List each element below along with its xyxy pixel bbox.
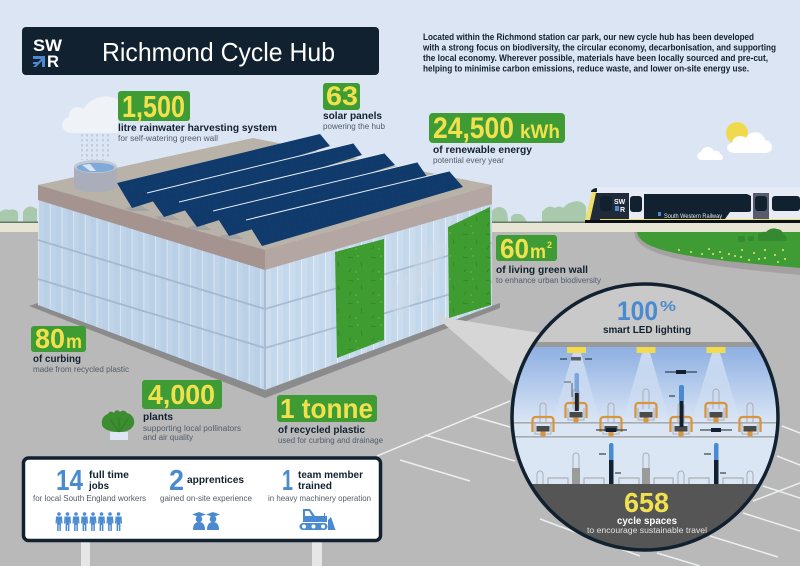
lawn (634, 228, 800, 275)
stat: recycled plastic: of recycled plastic (278, 424, 365, 436)
upper bike racks (532, 389, 760, 436)
stat: plants: 4,000 (148, 379, 215, 410)
stat: curbing: m (66, 332, 82, 353)
stat: plants: supporting local pollinators (143, 424, 241, 433)
car park ground (0, 232, 800, 566)
training stat (268, 465, 371, 530)
apprentices stat: 2 (169, 465, 184, 497)
SWR logo: SW (33, 36, 63, 55)
train: R (620, 207, 625, 214)
stat: renewable energy: potential every year (433, 156, 504, 165)
SWR logo: R (47, 52, 59, 71)
hanging bikes (560, 357, 732, 485)
intro paragraph (422, 32, 776, 74)
zoom beam (435, 316, 540, 385)
icon: plant (102, 410, 134, 440)
stat: solar panels: solar panels (323, 110, 382, 122)
stat: plants: plants (143, 411, 173, 423)
stat: rainwater (118, 89, 277, 143)
rain cloud (62, 96, 118, 160)
stat: curbing: 80 (35, 323, 65, 354)
stat: green wall: m (530, 242, 546, 263)
solar panels (117, 134, 463, 246)
stat: solar panels: powering the hub (323, 122, 386, 131)
left glass wall (38, 200, 265, 390)
sky background (0, 0, 800, 223)
living green wall: right (448, 207, 491, 318)
stat: green wall: 2 (547, 240, 552, 250)
training stat: 1 (282, 465, 293, 497)
building (29, 138, 500, 398)
icon: bulldozer (300, 509, 336, 530)
roof fascia: left (38, 185, 265, 270)
lamps (567, 347, 726, 353)
roof fascia: right (265, 185, 492, 270)
train: SW (614, 199, 626, 206)
right glass wall (264, 203, 492, 390)
SWR logo (33, 36, 63, 71)
jobs stat: jobs (88, 480, 109, 492)
jobs stat: 14 (56, 465, 83, 497)
stat: curbing: made from recycled plastic (33, 365, 129, 374)
train (585, 187, 800, 223)
pavement strip (0, 223, 800, 232)
training stat: in heavy machinery operation (268, 494, 371, 503)
floor racks (537, 453, 753, 485)
background trees (0, 201, 586, 222)
training stat: trained (298, 480, 332, 492)
cycle spaces stat: 658 (624, 487, 669, 518)
stat: curbing: of curbing (33, 353, 81, 365)
car park bay lines (377, 401, 800, 566)
LED lighting stat: smart LED lighting (603, 324, 691, 336)
train: South Western Railway (664, 213, 723, 220)
jobs sign panel (24, 458, 380, 540)
title bar: Richmond Cycle Hub (102, 37, 335, 67)
stat: solar panels (323, 81, 386, 131)
stat: green wall (496, 233, 601, 285)
stat: recycled plastic: used for curbing and drainage (278, 436, 384, 445)
stat: recycled plastic (277, 393, 384, 445)
intro paragraph: the local economy. Wherever possible, materials have been locally sourced and pre-cut, (423, 53, 768, 63)
jobs stat (33, 465, 146, 531)
stat: rainwater: litre rainwater harvesting system (118, 122, 277, 134)
icon: graduates (192, 512, 220, 530)
sign posts (81, 542, 322, 566)
dark floor (532, 484, 758, 548)
apprentices stat: gained on-site experience (160, 494, 253, 503)
kerb around building (29, 303, 500, 398)
apprentices stat: apprentices (187, 474, 244, 486)
light cones (559, 353, 734, 402)
training stat: team member (298, 469, 363, 481)
apprentices stat (160, 465, 253, 530)
LED lighting stat: 100 (617, 296, 658, 326)
living green wall: centre (335, 239, 384, 358)
stat: rainwater: 1,500 (122, 89, 185, 124)
stat: renewable energy: 24,500 (433, 112, 514, 145)
sun and clouds (697, 122, 772, 160)
stat: solar panels: 63 (326, 81, 358, 111)
stat: plants (142, 379, 241, 442)
stat: green wall: of living green wall (496, 264, 588, 276)
horizon line (0, 222, 800, 223)
stat: green wall: to enhance urban biodiversity (496, 276, 601, 285)
shelves (505, 422, 785, 424)
stat: renewable energy: kWh (520, 122, 560, 143)
zoom circle: cycle hub interior (505, 284, 785, 554)
intro paragraph: Located within the Richmond station car park, our new cycle hub has been developed (423, 32, 754, 42)
stat: green wall: 60 (500, 233, 529, 264)
jobs stat: full time (89, 469, 129, 481)
intro paragraph: helping to minimise carbon emissions, reduce waste, and lower on-site energy use. (423, 64, 749, 74)
LED lighting stat: % (660, 298, 676, 315)
rainwater tank (74, 160, 117, 192)
stat: renewable energy (429, 112, 565, 165)
stat: renewable energy: of renewable energy (433, 144, 532, 156)
title bar (22, 27, 379, 75)
cycle spaces stat: cycle spaces (617, 515, 677, 527)
roof top (38, 138, 492, 250)
stat: plants: and air quality (143, 433, 193, 442)
stat: rainwater: for self-watering green wall (118, 134, 218, 143)
stat: curbing (31, 323, 129, 374)
cycle spaces stat: to encourage sustainable travel (587, 526, 707, 535)
jobs stat: for local South England workers (33, 494, 146, 503)
LED lighting stat (603, 296, 691, 336)
stat: recycled plastic: 1 tonne (280, 393, 373, 424)
cycle spaces stat (587, 487, 707, 535)
icon: people (56, 512, 122, 531)
